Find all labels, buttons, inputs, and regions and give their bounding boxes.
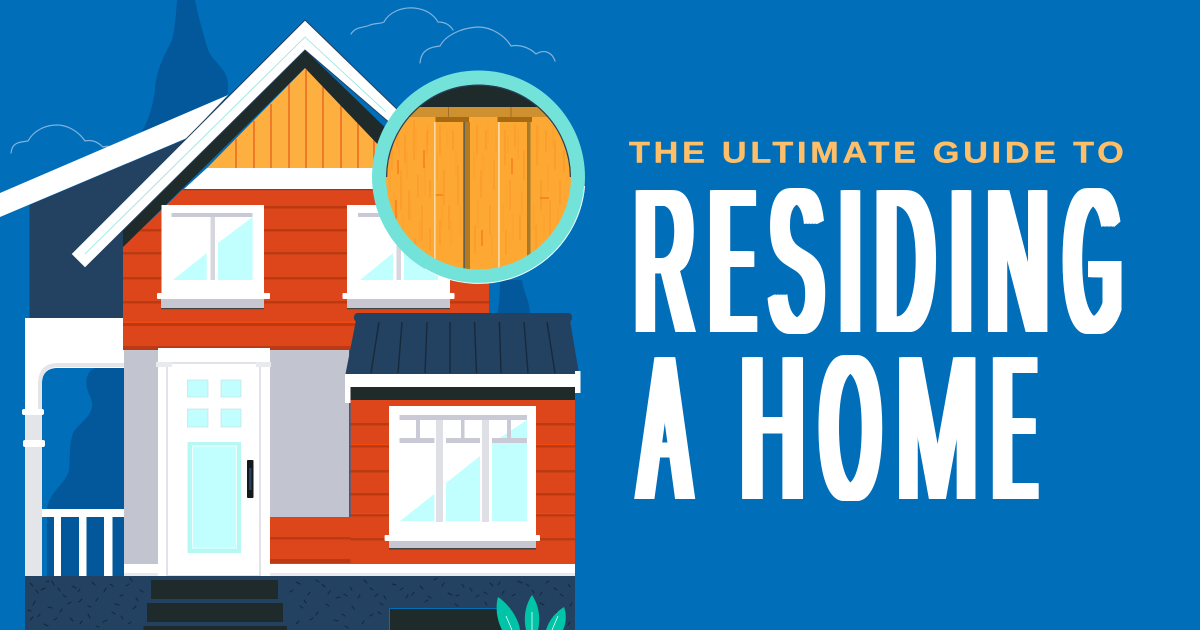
title line: A HOME: M — [890, 313, 973, 543]
side wall — [30, 133, 200, 319]
addition window — [385, 406, 540, 550]
title line: A HOME: A — [634, 313, 682, 543]
door panes — [188, 380, 241, 427]
title line: RESIDING: I — [944, 146, 967, 376]
title line: RESIDING: I — [833, 146, 856, 376]
title line: A HOME: E — [988, 313, 1027, 543]
title line: A HOME: O — [815, 313, 872, 543]
gable white trim — [71, 20, 402, 268]
title line: A HOME — [634, 313, 1039, 543]
title line: RESIDING: E — [705, 146, 745, 376]
frieze board — [184, 168, 400, 189]
basement window — [390, 608, 510, 630]
addition siding lines — [350, 423, 575, 540]
background tree right — [497, 280, 530, 316]
porch tree — [47, 368, 124, 576]
foundation — [25, 576, 575, 630]
steps — [144, 580, 287, 630]
siding lines — [123, 206, 489, 350]
window upper right — [342, 205, 454, 309]
gable wood siding — [207, 68, 395, 168]
title line: RESIDING: D — [870, 146, 927, 376]
boards — [434, 122, 436, 272]
orange wall — [123, 190, 489, 350]
porch — [22, 318, 124, 576]
railing — [42, 509, 124, 576]
magnifier: wood siding close-up — [372, 70, 585, 284]
addition wall — [350, 400, 575, 564]
addition fascia — [345, 371, 580, 403]
gray wall — [124, 350, 349, 564]
addition roof — [346, 313, 579, 374]
left roof — [0, 95, 228, 217]
front door — [156, 348, 271, 576]
base board — [124, 564, 575, 576]
title line: RESIDING: G — [1059, 146, 1114, 376]
inner arc shadow — [386, 85, 570, 177]
lower orange patch — [270, 517, 351, 564]
addition dark band — [350, 387, 575, 400]
window upper left — [157, 205, 270, 309]
door handle — [247, 460, 254, 498]
title line: RESIDING: S — [764, 146, 816, 376]
column — [25, 410, 42, 576]
wood grain — [390, 125, 566, 255]
porch opening — [42, 368, 124, 576]
top shadow — [418, 84, 539, 107]
clouds — [11, 8, 555, 153]
title line: A HOME: H — [735, 313, 797, 543]
title line: RESIDING — [629, 146, 1122, 376]
background tree top — [130, 0, 228, 150]
title line: RESIDING: N — [981, 146, 1042, 376]
title line: RESIDING: R — [629, 146, 688, 376]
gable dark band — [123, 50, 397, 247]
top rail — [408, 107, 549, 117]
door glass — [188, 442, 241, 553]
plant — [497, 595, 566, 630]
brackets — [436, 117, 532, 122]
house illustration — [0, 0, 586, 630]
